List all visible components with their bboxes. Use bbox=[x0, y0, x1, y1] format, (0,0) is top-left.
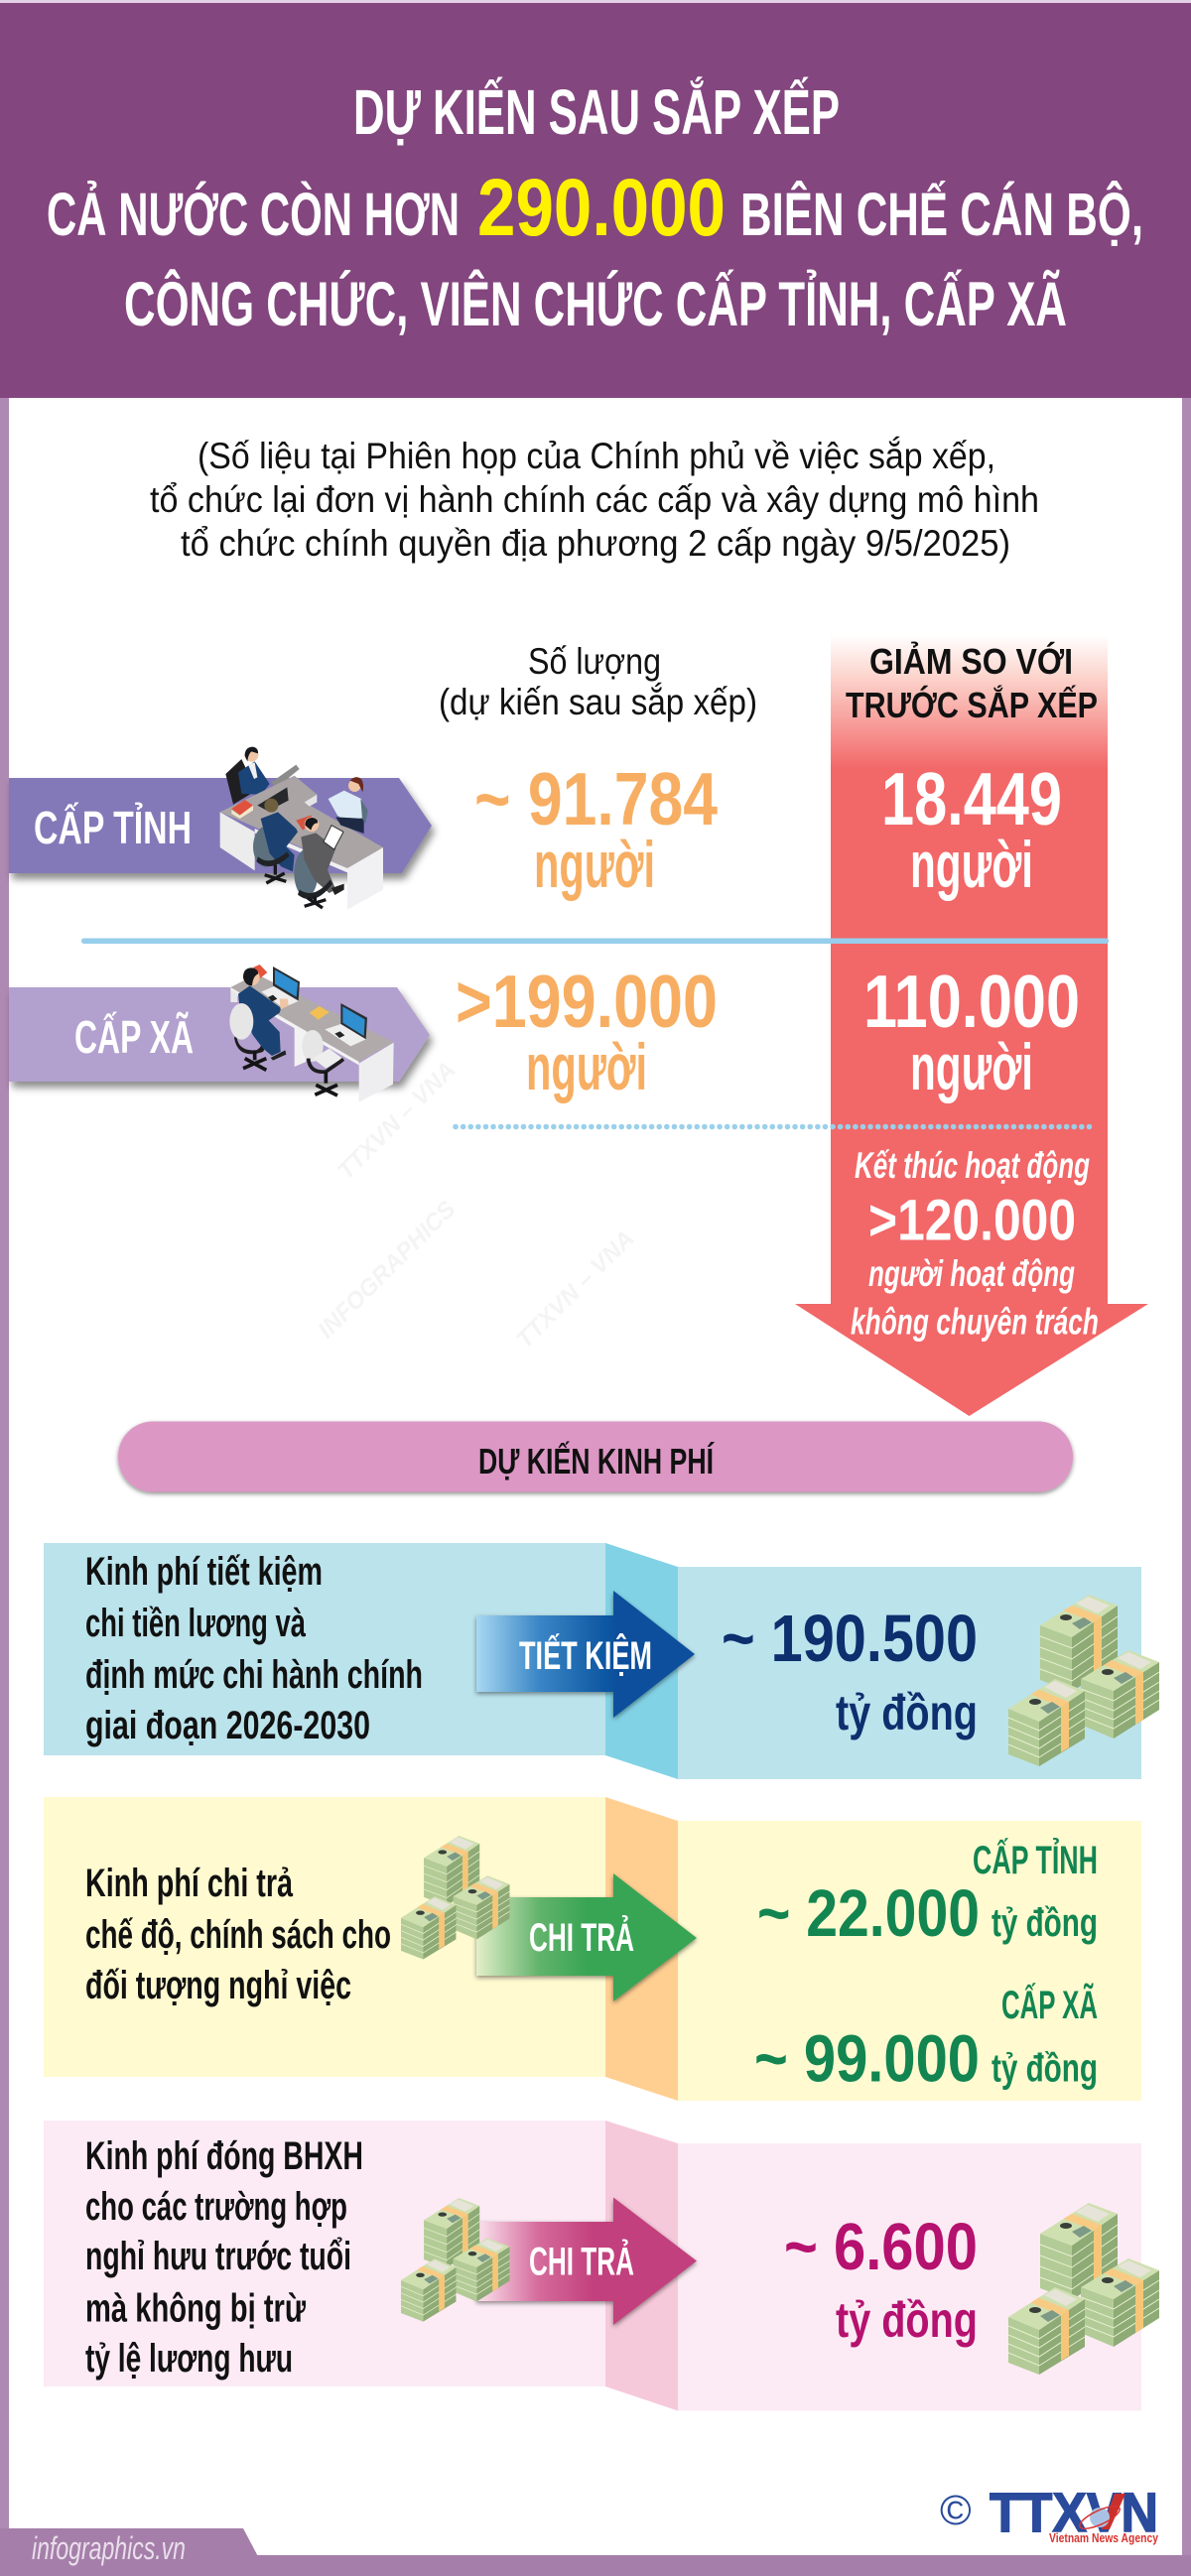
severance values bbox=[754, 1837, 1098, 2096]
severance description: đối tượng nghỉ việc bbox=[85, 1964, 351, 2007]
arrow: chi trả pink bbox=[476, 2197, 697, 2325]
copyright logo TTXVN: Vietnam News Agency bbox=[1049, 2531, 1158, 2545]
title line 2: 290.000 bbox=[477, 163, 726, 253]
icon: small money stacks bbox=[401, 2198, 509, 2322]
divider dotted bbox=[456, 1124, 1090, 1129]
heading pill: budget: DỰ KIẾN KINH PHÍ bbox=[478, 1441, 715, 1481]
tag: cấp tỉnh bbox=[9, 778, 432, 873]
arrow: chi trả pink: CHI TRẢ bbox=[529, 2239, 634, 2284]
quantity: cấp xã: >199.000 bbox=[456, 960, 718, 1043]
header banner bbox=[0, 3, 1191, 398]
red down arrow column bbox=[795, 635, 1148, 1416]
copyright logo TTXVN: TTXVN bbox=[990, 2481, 1158, 2543]
reduction: cấp xã: 110.000 bbox=[863, 960, 1080, 1043]
column heading: reduction: TRƯỚC SẮP XẾP bbox=[846, 684, 1098, 725]
tag: cấp xã bbox=[9, 987, 430, 1082]
insurance description: tỷ lệ lương hưu bbox=[85, 2337, 293, 2381]
severance values: tỷ đồng bbox=[992, 1901, 1098, 1945]
subtitle: (Số liệu tại Phiên họp của Chính phủ về việc sắp xếp, bbox=[198, 435, 995, 476]
title line 1: DỰ KIẾN SAU SẮP XẾP bbox=[353, 75, 840, 148]
icon: small money stacks bbox=[401, 1836, 509, 1959]
subtitle bbox=[150, 435, 1039, 564]
watermarks: TTXVN – VNA bbox=[511, 1225, 640, 1353]
arrow: tiết kiệm bbox=[476, 1591, 695, 1718]
severance values: CẤP XÃ bbox=[1001, 1982, 1098, 2027]
insurance description: cho các trường hợp bbox=[85, 2185, 347, 2229]
watermarks bbox=[313, 1057, 640, 1353]
subtitle: tổ chức lại đơn vị hành chính các cấp và xây dựng mô hình bbox=[150, 478, 1039, 520]
reduction: cấp tỉnh bbox=[881, 757, 1062, 901]
savings value: ~ 190.500 bbox=[722, 1602, 978, 1676]
quantity: cấp tỉnh: người bbox=[534, 828, 655, 901]
panel: social insurance bbox=[44, 2121, 1159, 2411]
title line 2: CẢ NƯỚC CÒN HƠN bbox=[47, 181, 460, 248]
callout: ended activity: người hoạt động bbox=[868, 1253, 1075, 1294]
reduction: cấp xã: người bbox=[910, 1030, 1033, 1103]
quantity: cấp tỉnh bbox=[474, 757, 718, 901]
reduction: cấp tỉnh: 18.449 bbox=[881, 757, 1062, 840]
arrow: tiết kiệm: TIẾT KIỆM bbox=[519, 1632, 652, 1678]
insurance description: mà không bị trừ bbox=[85, 2286, 306, 2330]
copyright logo TTXVN: © bbox=[940, 2487, 972, 2534]
subtitle: tổ chức chính quyền địa phương 2 cấp ngày 9/5/2025) bbox=[181, 522, 1010, 564]
panel: severance payment bbox=[44, 1797, 1141, 2101]
severance values: ~ 22.000 bbox=[757, 1876, 980, 1951]
arrow: chi trả green: CHI TRẢ bbox=[529, 1914, 634, 1960]
reduction: cấp tỉnh: người bbox=[910, 828, 1033, 901]
illustration: meeting desk bbox=[220, 747, 383, 910]
quantity: cấp xã bbox=[456, 960, 718, 1103]
watermarks: INFOGRAPHICS bbox=[313, 1196, 461, 1344]
column heading: quantity: Số lượng bbox=[528, 640, 661, 682]
insurance description: nghỉ hưu trước tuổi bbox=[85, 2235, 351, 2278]
quantity: cấp xã: người bbox=[526, 1030, 647, 1103]
tag: cấp tỉnh: CẤP TỈNH bbox=[34, 802, 192, 853]
callout: ended activity: >120.000 bbox=[868, 1189, 1076, 1252]
savings description: Kinh phí tiết kiệm bbox=[85, 1550, 323, 1594]
savings value bbox=[722, 1602, 978, 1740]
savings description: chi tiền lương và bbox=[85, 1602, 307, 1645]
severance values: ~ 99.000 bbox=[754, 2022, 980, 2096]
icon: money stacks bbox=[1008, 1595, 1159, 1766]
icon: money stacks bbox=[1008, 2203, 1159, 2375]
tag: cấp xã: CẤP XÃ bbox=[74, 1011, 194, 1063]
severance values: tỷ đồng bbox=[992, 2046, 1098, 2090]
title line 2 bbox=[47, 163, 1143, 253]
column heading: quantity: (dự kiến sau sắp xếp) bbox=[439, 681, 757, 722]
panel: savings bbox=[44, 1543, 1159, 1779]
severance description: Kinh phí chi trả bbox=[85, 1862, 294, 1905]
reduction: cấp xã bbox=[863, 960, 1080, 1103]
savings description: giai đoạn 2026-2030 bbox=[85, 1704, 370, 1747]
insurance value bbox=[784, 2210, 978, 2348]
arrow: chi trả green bbox=[476, 1873, 697, 2001]
footer tab: website: infographics.vn bbox=[32, 2530, 186, 2566]
divider blue bbox=[81, 939, 1109, 944]
severance description: chế độ, chính sách cho bbox=[85, 1913, 391, 1957]
severance values: CẤP TỈNH bbox=[973, 1837, 1098, 1882]
heading pill: budget bbox=[118, 1421, 1073, 1492]
insurance description bbox=[85, 2134, 363, 2381]
savings description bbox=[85, 1550, 423, 1747]
savings description: định mức chi hành chính bbox=[85, 1653, 423, 1697]
insurance value: tỷ đồng bbox=[836, 2292, 978, 2348]
footer tab: website bbox=[0, 2528, 260, 2576]
column heading: reduction: GIẢM SO VỚI bbox=[869, 640, 1073, 682]
callout: ended activity: không chuyên trách bbox=[851, 1302, 1099, 1342]
illustration: two workstations bbox=[229, 965, 394, 1102]
watermarks: TTXVN – VNA bbox=[332, 1057, 462, 1185]
callout: ended activity: Kết thúc hoạt động bbox=[855, 1145, 1090, 1186]
savings value: tỷ đồng bbox=[836, 1685, 978, 1740]
column heading: reduction bbox=[846, 640, 1098, 725]
quantity: cấp tỉnh: ~ 91.784 bbox=[474, 757, 718, 840]
column heading: quantity bbox=[439, 640, 757, 722]
callout: ended activity bbox=[851, 1145, 1099, 1342]
severance description bbox=[85, 1862, 391, 2007]
insurance value: ~ 6.600 bbox=[784, 2210, 978, 2284]
insurance description: Kinh phí đóng BHXH bbox=[85, 2134, 363, 2178]
